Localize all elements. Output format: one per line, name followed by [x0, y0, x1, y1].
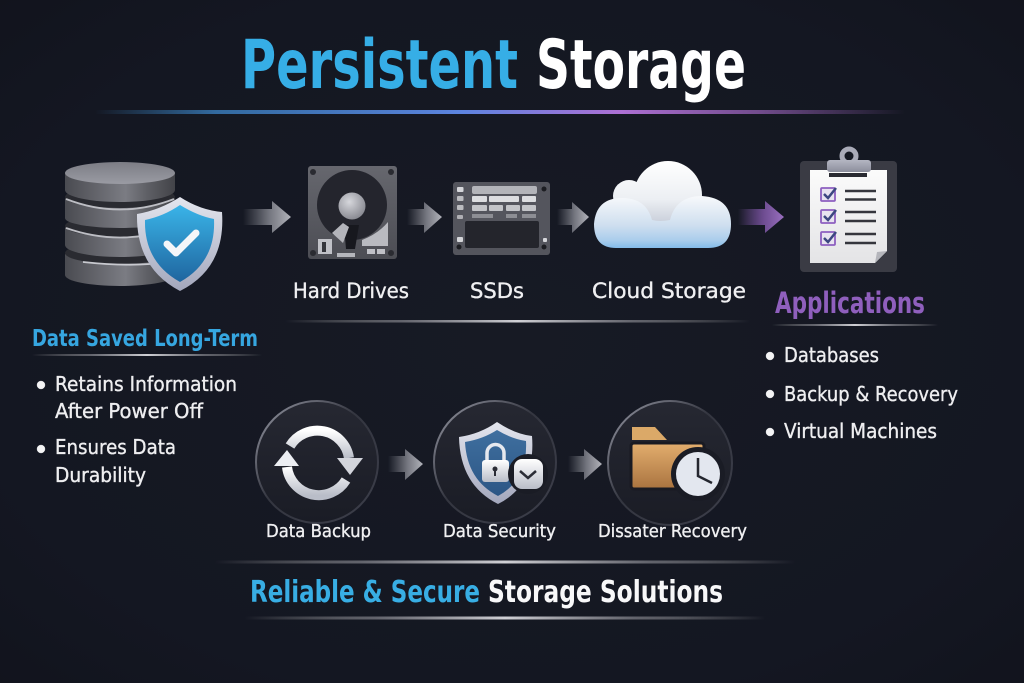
arrow 5 — [388, 449, 423, 480]
list: data saved — [37, 372, 237, 487]
icon: SSD — [453, 182, 550, 255]
labels: protection services: Data Backup — [266, 521, 371, 542]
tagline: Reliable & Secure — [250, 575, 480, 610]
list: applications: Virtual Machines — [784, 419, 937, 443]
arrow 4 — [738, 201, 784, 233]
list: data saved: After Power Off — [55, 399, 204, 423]
icon: data security — [434, 401, 556, 523]
labels: protection services: Data Security — [443, 521, 556, 542]
labels: protection services: Dissater Recovery — [598, 521, 747, 542]
icon: cloud — [594, 161, 731, 248]
arrow 3 — [557, 202, 589, 233]
arrow 2 — [407, 202, 442, 233]
labels: storage types: Cloud Storage — [592, 279, 746, 303]
heading: data saved long-term: Data Saved Long-Term — [32, 326, 258, 352]
labels: storage types — [293, 279, 746, 303]
icon: database with shield — [65, 162, 222, 291]
labels: protection services — [266, 521, 747, 542]
arrow 1 — [243, 201, 291, 233]
icon: hard drive — [308, 166, 397, 259]
icon: disaster recovery — [608, 401, 732, 525]
list: applications: Backup & Recovery — [784, 382, 958, 406]
list: data saved: Durability — [55, 463, 146, 487]
tagline — [250, 575, 723, 610]
labels: storage types: SSDs — [470, 279, 524, 303]
list: data saved: Retains Information — [55, 372, 237, 396]
list: applications — [766, 343, 958, 443]
arrow 6 — [568, 449, 602, 480]
list: applications: Databases — [784, 343, 879, 367]
labels: storage types: Hard Drives — [293, 279, 409, 303]
icon: clipboard checklist — [800, 149, 897, 272]
tagline: Storage Solutions — [488, 575, 723, 610]
heading: applications: Applications — [775, 286, 925, 320]
list: data saved: Ensures Data — [55, 435, 176, 459]
title: Persistent — [241, 26, 518, 105]
icon: data backup — [256, 401, 378, 523]
title: Storage — [536, 26, 746, 105]
